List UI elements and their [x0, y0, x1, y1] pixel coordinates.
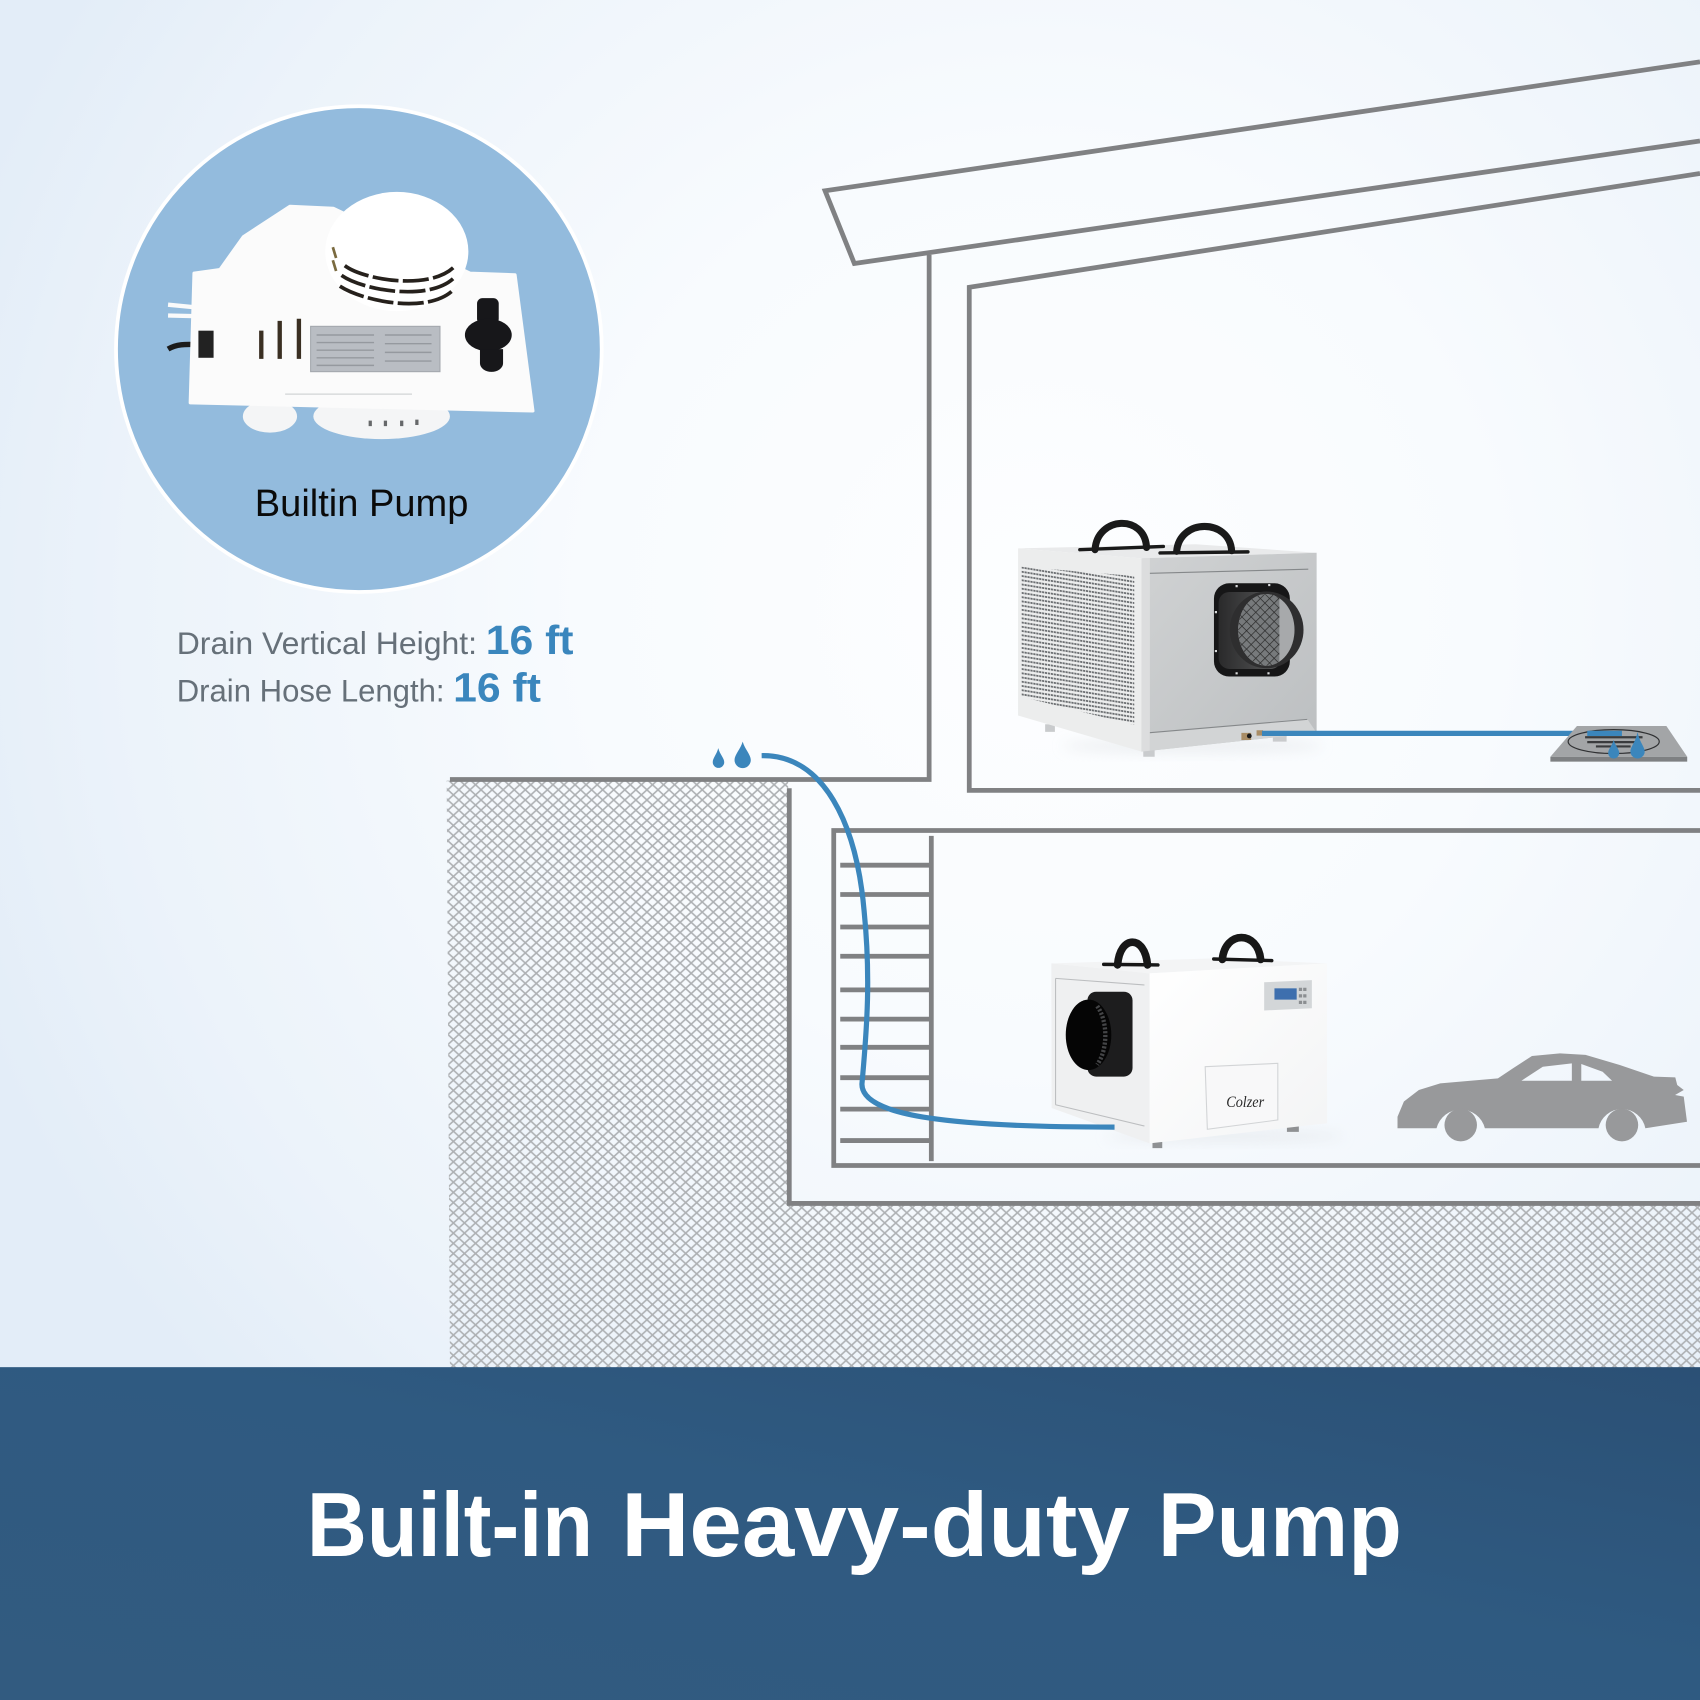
front face: [1150, 963, 1327, 1143]
roof: [825, 62, 1700, 263]
outlet fitting: [465, 298, 512, 372]
basement room: [834, 830, 1700, 1165]
access panel: [1205, 1063, 1278, 1129]
floor shadow: [1062, 738, 1323, 754]
base plate and body: [190, 206, 533, 411]
vent slots: [340, 266, 453, 304]
wheels: [1444, 1109, 1477, 1141]
dome: [325, 192, 468, 311]
outer wall and ground line: [450, 255, 929, 780]
brand name: Colzer: [1226, 1093, 1265, 1111]
plug: [198, 331, 214, 358]
plate seam: [285, 393, 412, 395]
hose length value: 16 ft: [453, 664, 541, 710]
pump callout circle: [116, 106, 602, 592]
handles: [1104, 938, 1272, 965]
water drops: [713, 742, 751, 768]
feet: [1045, 724, 1287, 757]
side grille: [1022, 567, 1134, 725]
upper drain hose: [1262, 731, 1622, 736]
title: Pump: [1158, 1475, 1402, 1576]
left vent slots: [333, 247, 336, 271]
pump caption: Builtin Pump: [255, 483, 468, 525]
corner strip: [1142, 558, 1150, 752]
top face: [1018, 544, 1317, 558]
floor shadow: [1106, 1130, 1344, 1143]
duct grate: [1238, 594, 1280, 666]
house outline: [450, 62, 1700, 1203]
ground hatch: [447, 781, 1700, 1368]
title: [307, 1475, 1402, 1576]
lcd screen: [1274, 988, 1297, 1000]
bottom holes: [369, 420, 418, 426]
car: [1398, 1053, 1687, 1141]
lower kick panel: [1150, 719, 1317, 751]
front face: [1142, 553, 1317, 752]
panel seams: [1150, 569, 1308, 733]
drain connector: [1241, 730, 1263, 740]
lower dehumidifier: [1051, 938, 1344, 1148]
bolts: [1215, 584, 1270, 674]
handles: [1080, 523, 1248, 553]
duct grille: [1097, 1006, 1105, 1065]
title banner: [0, 1367, 1700, 1700]
floor drain: [1550, 726, 1687, 762]
feet: [1152, 1123, 1299, 1148]
side face: [1018, 548, 1142, 752]
title: Heavy-duty: [621, 1475, 1130, 1576]
duct ring: [1066, 1000, 1111, 1070]
power cord: [168, 344, 206, 349]
pump illustration: [168, 192, 533, 439]
duct flange: [1214, 583, 1290, 677]
duct inner: [1238, 594, 1295, 666]
side slits: [261, 319, 299, 359]
main drain hose: [762, 756, 1115, 1127]
ladder: [840, 836, 931, 1161]
upper dehumidifier: [1018, 523, 1323, 757]
drain specifications: [177, 617, 574, 710]
title: Built-in: [307, 1475, 593, 1576]
hose length label: Drain Hose Length:: [177, 673, 445, 708]
white wires: [168, 305, 212, 317]
upper room walls: [969, 173, 1700, 790]
control panel: [1264, 980, 1312, 1010]
panel seams: [1056, 978, 1144, 1126]
duct body: [1219, 592, 1282, 669]
left face: [1051, 963, 1150, 1143]
vertical height label: Drain Vertical Height:: [177, 626, 477, 661]
spec label: [311, 326, 440, 372]
duct ring: [1230, 592, 1304, 668]
vertical height value: 16 ft: [486, 617, 574, 663]
top face: [1051, 958, 1327, 973]
basement shell: [789, 788, 1700, 1203]
duct flange: [1087, 992, 1133, 1077]
lower bumps: [243, 400, 297, 433]
drain drops: [1608, 740, 1619, 758]
car body: [1398, 1053, 1687, 1128]
